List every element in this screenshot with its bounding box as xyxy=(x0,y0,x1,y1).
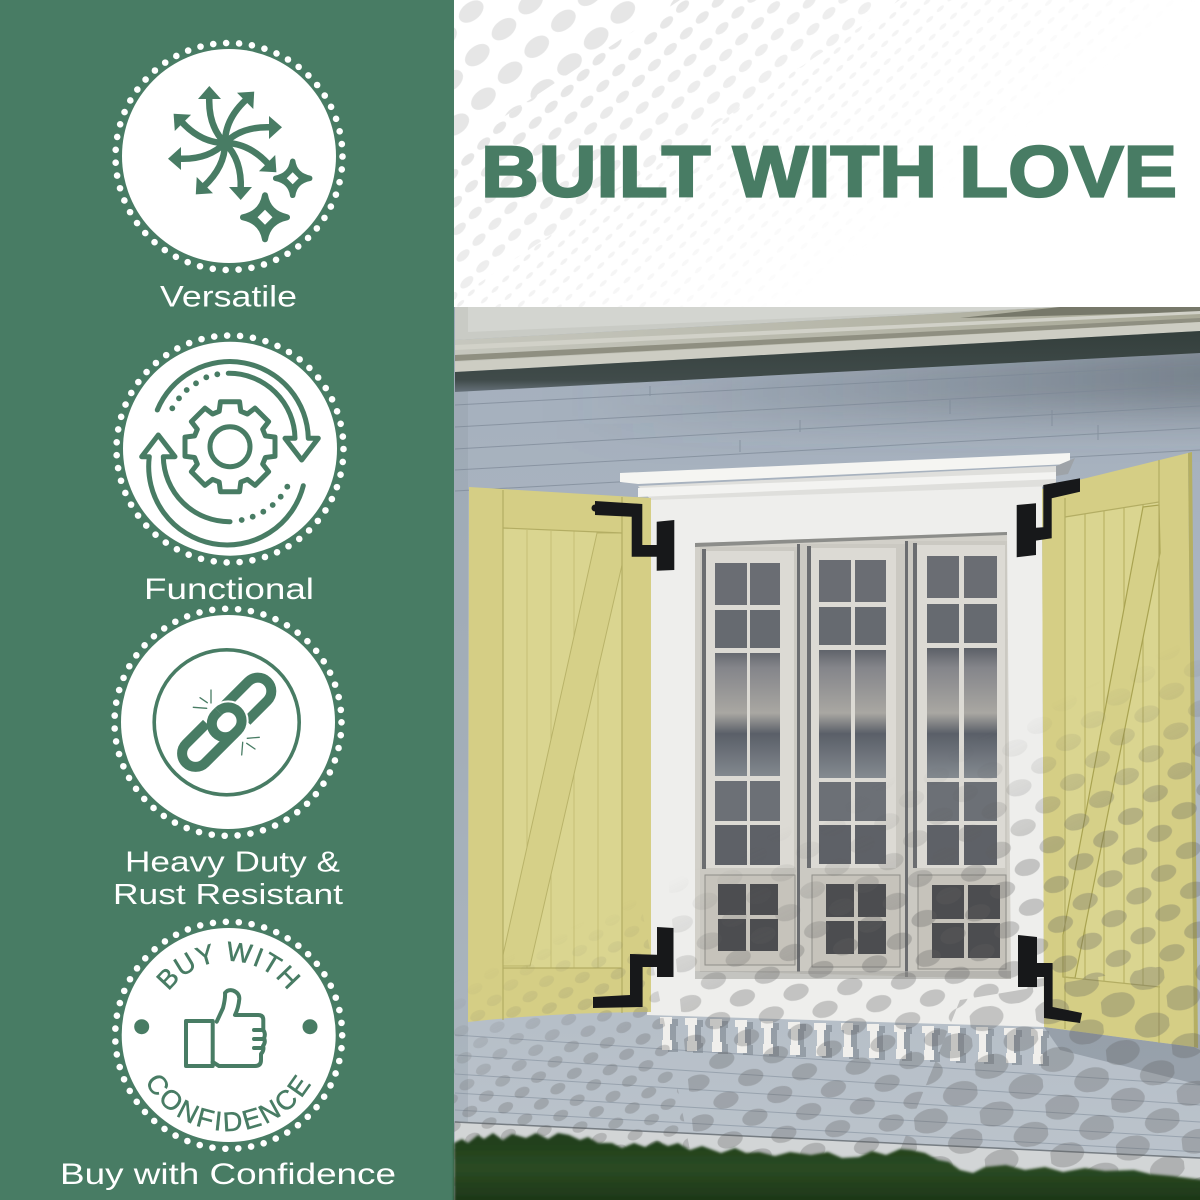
title: BUILT WITH LOVE xyxy=(481,132,1177,212)
shutter brace xyxy=(503,533,622,966)
bushes xyxy=(454,1133,1200,1200)
icon: large sparkle xyxy=(243,195,287,239)
hinge: top right xyxy=(1017,478,1080,557)
window trim xyxy=(620,453,1075,1027)
stamp text: confidence: CONFIDENCE xyxy=(148,1074,312,1132)
label: heavy duty and rust resistant: Heavy Duty & xyxy=(125,846,340,878)
sill corbels xyxy=(660,1017,1049,1066)
icon: thumbs up xyxy=(186,990,265,1066)
badge: functional xyxy=(116,336,344,606)
wall xyxy=(454,307,1200,1200)
sash: centre xyxy=(797,544,905,974)
icon: sparks xyxy=(193,690,259,755)
sash: left xyxy=(700,547,797,972)
window sashes xyxy=(695,541,1011,979)
label: heavy duty and rust resistant: Rust Resistant xyxy=(113,879,343,911)
right shutter xyxy=(1042,452,1198,1048)
icon: counter-clockwise arrow xyxy=(142,435,303,545)
stamp text: buy with: BUY WITH xyxy=(156,941,301,990)
roof moulding xyxy=(455,307,1200,392)
shutter brace xyxy=(1063,505,1160,978)
icon: spiral arrows xyxy=(166,84,284,202)
icon: ring xyxy=(154,650,299,795)
badge: versatile xyxy=(116,43,342,314)
panel: window photo scene xyxy=(454,307,1200,1200)
icon: small sparkle xyxy=(276,161,310,195)
halftone overlay xyxy=(454,669,1200,1186)
label: versatile: Versatile xyxy=(160,280,297,314)
hinge: bottom left xyxy=(593,927,674,1008)
icon: chain link xyxy=(176,672,277,773)
label: functional: Functional xyxy=(144,573,314,606)
icon: clockwise arrow xyxy=(157,362,318,460)
label: buy with confidence: Buy with Confidence xyxy=(60,1158,396,1191)
stamp dots xyxy=(134,1019,318,1034)
icon: gear xyxy=(185,402,275,492)
label: heavy duty and rust resistant xyxy=(113,846,343,911)
sash: right xyxy=(905,541,1007,977)
panel: heading area with halftone xyxy=(454,0,1200,307)
hinge: bottom right xyxy=(1018,935,1082,1023)
panel: green feature sidebar xyxy=(0,0,454,1200)
shutter cast shadow xyxy=(1044,1027,1200,1085)
hinges xyxy=(592,478,1082,1023)
left shutter xyxy=(468,487,651,1022)
hinge: top left xyxy=(592,501,674,571)
baseboard xyxy=(455,1122,1200,1200)
badge: buy with confidence xyxy=(60,918,396,1191)
badge: heavy duty xyxy=(113,609,343,911)
